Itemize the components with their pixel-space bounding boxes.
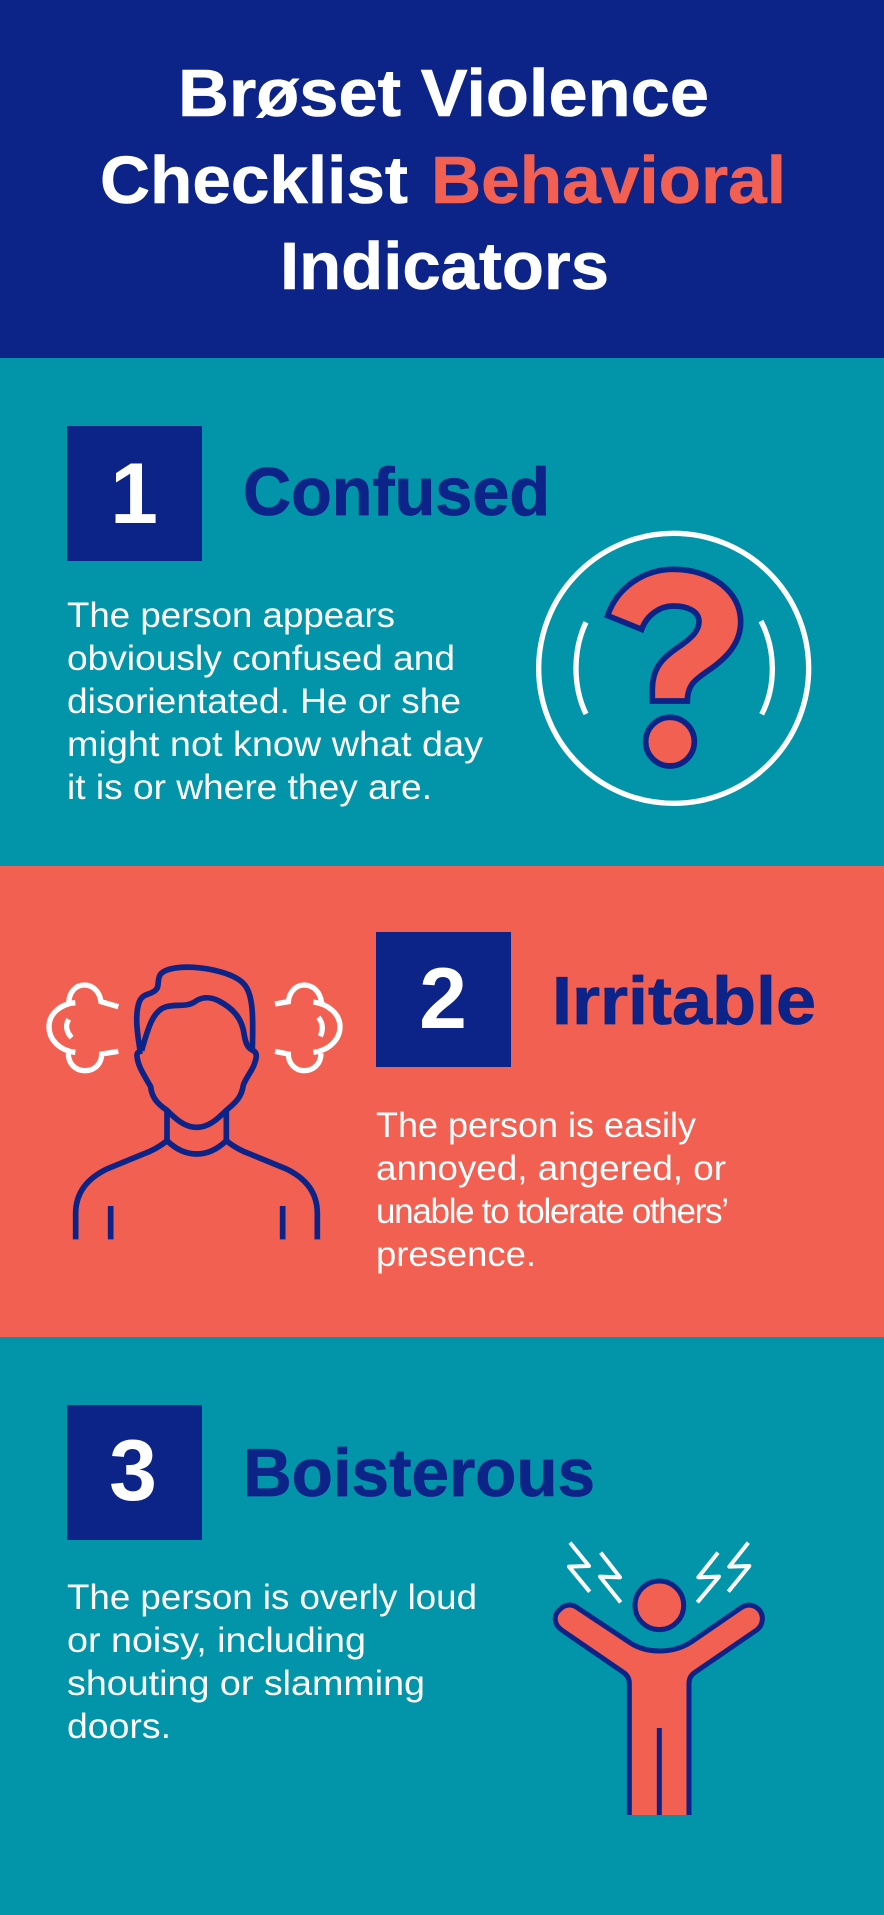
text block: confused description: The person appears (67, 596, 395, 635)
text block: confused description: it is or where they are. (67, 768, 432, 807)
title: Behavioral (431, 143, 786, 218)
text block: boisterous description: or noisy, including (67, 1621, 366, 1660)
panel: irritable (0, 866, 884, 1337)
text block: boisterous description: shouting or slamming (67, 1664, 425, 1703)
heading: confused: Confused (243, 454, 550, 530)
text block: confused description: might not know what day (67, 725, 484, 764)
number badge 1: 1 (110, 446, 158, 542)
text block: confused description: obviously confused and (67, 639, 455, 678)
icon: shouting figure with lightning bolts (555, 1543, 762, 1815)
text block: boisterous description: The person is overly loud (67, 1578, 477, 1617)
title (100, 56, 786, 304)
title: Brøset Violence (178, 56, 709, 131)
icon: question mark in circle (539, 533, 809, 803)
panel: boisterous (0, 1337, 884, 1915)
text block: irritable description (376, 1106, 729, 1274)
text block: confused description (67, 596, 484, 807)
text block: irritable description: The person is easily (376, 1106, 697, 1145)
steam clouds (49, 985, 340, 1071)
text block: irritable description: unable to tolerate others’ (376, 1192, 729, 1231)
text block: confused description: disorientated. He or she (67, 682, 461, 721)
number badge 2: 2 (419, 951, 467, 1047)
title: Indicators (280, 229, 609, 304)
text block: boisterous description (67, 1578, 477, 1746)
text block: boisterous description: doors. (67, 1707, 171, 1746)
number badge 3: 3 (109, 1423, 157, 1519)
text block: irritable description: presence. (376, 1235, 536, 1274)
heading: irritable: Irritable (552, 963, 816, 1039)
text block: irritable description: annoyed, angered, or (376, 1149, 726, 1188)
number badge 1 (67, 426, 202, 561)
title: Checklist (100, 143, 408, 218)
icon: angry person with steam (49, 967, 340, 1239)
panel: header (0, 0, 884, 358)
person outline (76, 967, 317, 1239)
heading: boisterous: Boisterous (243, 1435, 595, 1511)
panel: confused (0, 358, 884, 866)
number badge 2 (376, 932, 511, 1067)
number badge 3 (67, 1405, 202, 1540)
